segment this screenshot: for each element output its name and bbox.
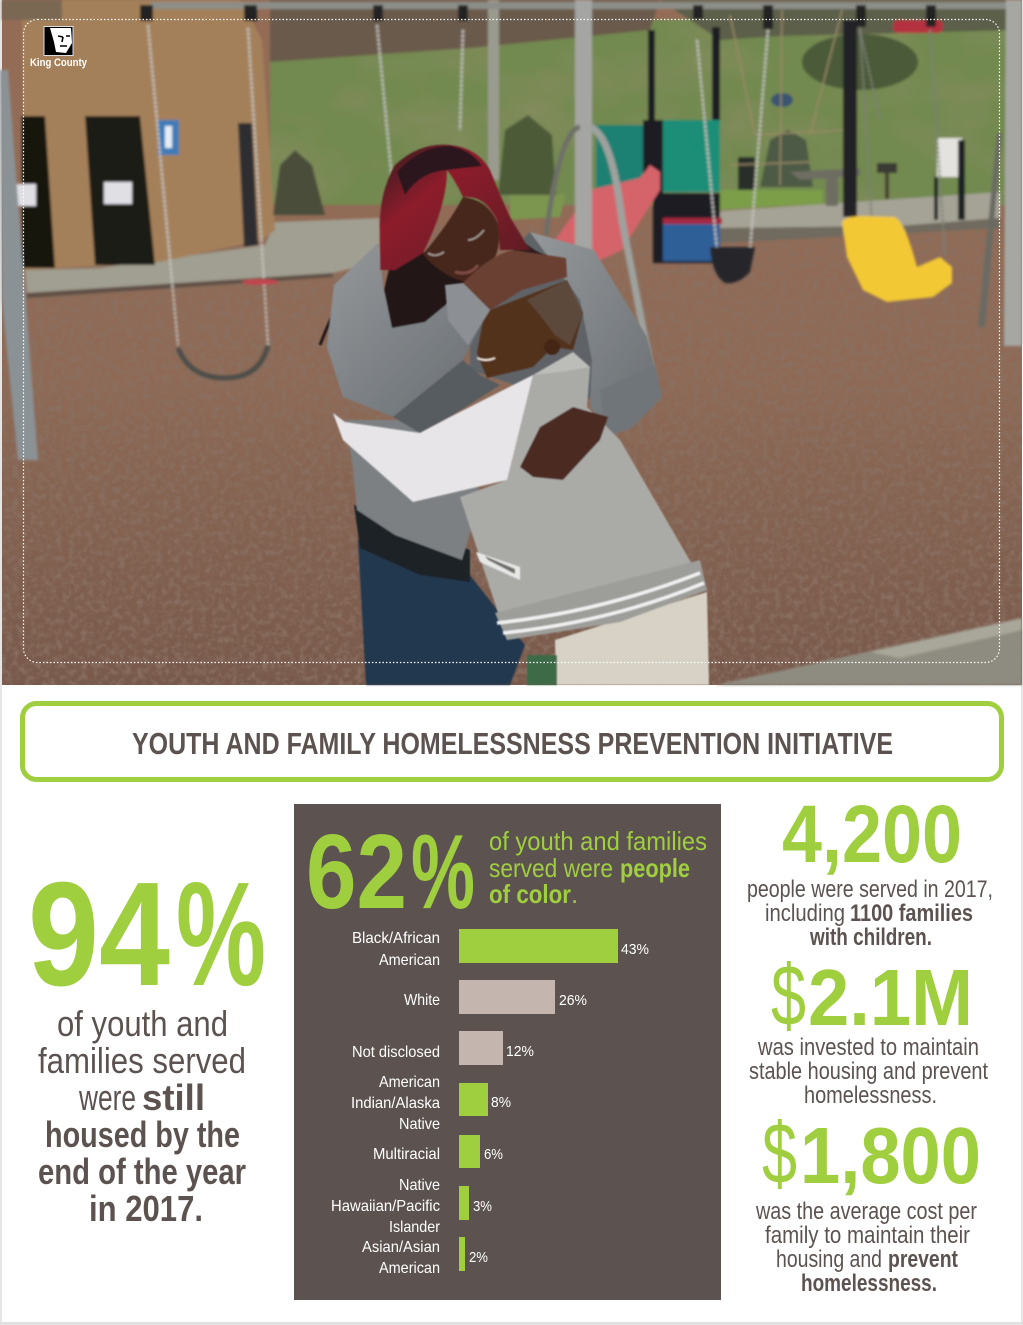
panel: people of color bar chart [294,804,721,1300]
62% statistic: served were [489,853,613,883]
right stat: $1,800 average cost: $ [762,1106,797,1202]
inner jacket [393,360,500,433]
left stat: 94%: in 2017. [89,1188,203,1229]
62% statistic: people [620,853,690,883]
plaid shirt [527,655,557,685]
62% statistic: . [571,879,578,909]
shrubs [273,150,325,215]
bar: American Indian/Alaska Native 8%: American [379,1074,440,1091]
bar: American Indian/Alaska Native 8% [351,1074,511,1133]
white sleeve [333,375,533,502]
near arm [327,243,488,417]
left stat: 94%: % [176,852,266,1017]
background poles, sign, bin, grill, bench [488,0,499,180]
62% statistic [306,813,707,931]
right stat: $2.1M invested: $ [771,948,806,1044]
swing frame [0,0,1022,460]
brick building [2,0,275,270]
far arm [530,232,662,437]
dark shirt [354,505,470,582]
left stat: 94%: still [142,1077,205,1118]
62% statistic: of color [489,879,571,909]
bar: Multiracial 6%: 6% [484,1146,503,1163]
hillside [270,15,1022,205]
left stat: 94%: 94 [28,852,170,1017]
walkway [25,218,380,293]
right stat: $1,800 average cost: homelessness. [801,1270,937,1297]
bar: Native Hawaiian/Pacific Islander 3%: Native [399,1177,440,1194]
right stat: $1,800 average cost [755,1106,981,1297]
bar: Not disclosed 12%: 12% [506,1043,534,1060]
bar: Native Hawaiian/Pacific Islander 3%: 3% [473,1198,492,1215]
dark hair underside [384,250,470,328]
right stat: 4,200 people served: 4,200 [782,789,962,880]
King County logo [30,26,88,69]
right stat: 4,200 people served: with children. [809,924,932,951]
right stat: $2.1M invested [749,948,988,1109]
King County logo: King County [30,57,88,69]
bar: American Indian/Alaska Native 8%: Native [399,1116,440,1133]
right stat: $2.1M invested: homelessness. [804,1082,937,1109]
left stat: 94%: families served [38,1040,246,1081]
pants [555,592,709,685]
face [423,197,499,282]
left stat: 94%: were [78,1077,136,1118]
62% statistic: 62 [306,813,407,931]
lower jacket [345,420,480,560]
bar: Not disclosed 12% [352,1031,534,1065]
mother cuff [445,283,490,345]
bar: Asian/Asian American 2%: American [379,1260,440,1277]
bar: Multiracial 6% [373,1135,503,1168]
long hair wisps behind [320,240,580,345]
left stat: 94%: end of the year [38,1151,246,1192]
right stat: 4,200 people served [747,789,993,951]
right stat: $1,800 average cost: family to maintain their [765,1222,970,1249]
woman [320,145,662,685]
bar: Black/African American 43%: Black/African [352,930,440,947]
head [477,280,583,378]
jacket collar and side shading [533,352,590,375]
bar: American Indian/Alaska Native 8%: Indian/Alaska [351,1095,440,1112]
bar: Native Hawaiian/Pacific Islander 3%: Hawaiian/Pacific [331,1198,440,1215]
bar: White 26% [404,980,587,1014]
right stat: 4,200 people served: including [765,900,845,927]
bar: Asian/Asian American 2% [362,1237,488,1277]
right stat: $2.1M invested: 2.1M [808,953,973,1042]
hem ribbing and stripes [495,560,707,640]
bar: Asian/Asian American 2%: 2% [469,1249,488,1266]
curb [715,618,1022,685]
left stat: 94%: housed by the [45,1114,240,1155]
bar: Native Hawaiian/Pacific Islander 3%: Islander [389,1219,441,1236]
right stat: $2.1M invested: was invested to maintain [757,1034,979,1061]
left stat: 94%: of youth and [57,1003,228,1044]
right stat: $1,800 average cost: 1,800 [800,1111,981,1200]
left stat: 94% [28,852,266,1229]
title box [22,704,1002,780]
boy [333,250,709,685]
bar: Not disclosed 12%: Not disclosed [352,1044,440,1061]
torso behind the boy [470,232,600,400]
swing chains and seats [148,25,952,378]
jeans [358,540,525,685]
red hair [380,145,530,270]
photo: mother hugging son on a playground [0,0,1022,685]
bar: Multiracial 6%: Multiracial [373,1146,440,1163]
pocket [476,552,520,580]
right stat: $1,800 average cost: housing and [776,1246,882,1273]
bar: Native Hawaiian/Pacific Islander 3% [331,1177,492,1236]
bar: Black/African American 43% [352,929,649,969]
right stat: $1,800 average cost: prevent [888,1246,958,1273]
bar: Asian/Asian American 2%: Asian/Asian [362,1239,440,1256]
play structure [548,27,722,265]
bar: American Indian/Alaska Native 8%: 8% [491,1094,511,1111]
62% statistic: of youth and families [489,826,707,856]
mother hand on boy back [520,407,608,480]
right stat: 4,200 people served: 1100 families [850,900,973,927]
bar: White 26%: White [404,992,440,1009]
mother hand on boy head [463,250,567,310]
bar: White 26%: 26% [559,992,587,1009]
dotted photo frame [24,20,1000,662]
gray varsity jacket [460,352,707,640]
bar: Black/African American 43%: 43% [621,941,649,958]
bar: Black/African American 43%: American [379,952,440,969]
right stat: $1,800 average cost: was the average cost per [755,1198,977,1225]
62% statistic: % [411,813,475,931]
